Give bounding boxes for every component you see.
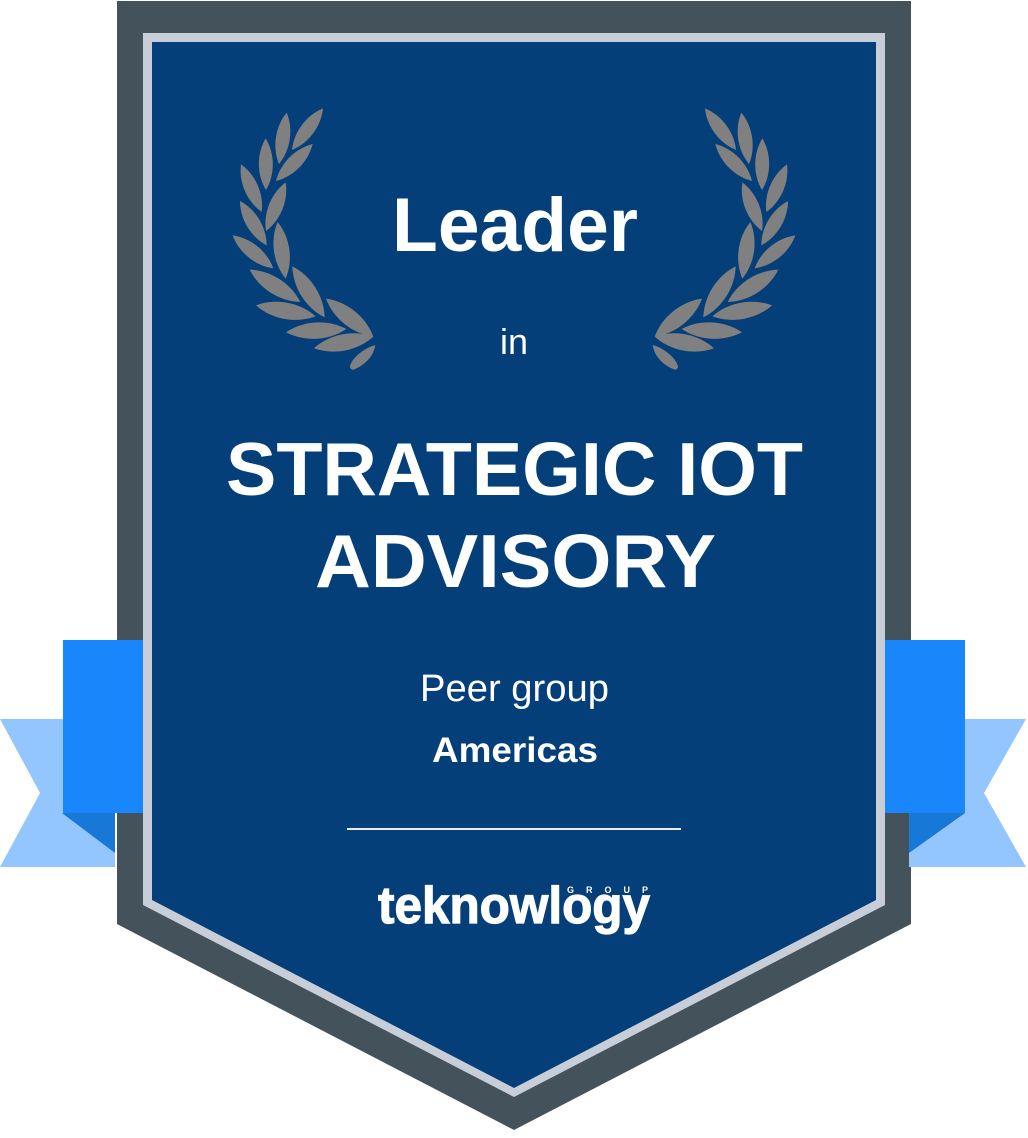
icon: right laurel branch bbox=[650, 104, 800, 370]
text: Peer group: Peer group bbox=[420, 668, 609, 710]
title line: ADVISORY: ADVISORY bbox=[315, 519, 716, 603]
shield outer frame bbox=[117, 1, 911, 1130]
left ribbon band bbox=[63, 640, 145, 813]
left ribbon fold bbox=[62, 813, 115, 853]
right ribbon tail bbox=[909, 719, 1026, 867]
text: in: in bbox=[500, 321, 528, 362]
shield navy panel bbox=[152, 42, 876, 1088]
left ribbon tail bbox=[0, 719, 115, 867]
logo: teknowlogy group: teknowlogy bbox=[378, 877, 650, 935]
right ribbon band bbox=[883, 640, 965, 813]
shield silver border bbox=[143, 33, 885, 1097]
title line: STRATEGIC IOT: STRATEGIC IOT bbox=[226, 427, 803, 511]
right ribbon fold bbox=[909, 813, 965, 853]
icon: left laurel branch bbox=[228, 104, 378, 370]
text: Americas: Americas bbox=[432, 731, 598, 770]
logo: teknowlogy group: GROUP bbox=[567, 885, 648, 895]
heading: Leader: Leader bbox=[392, 183, 638, 268]
